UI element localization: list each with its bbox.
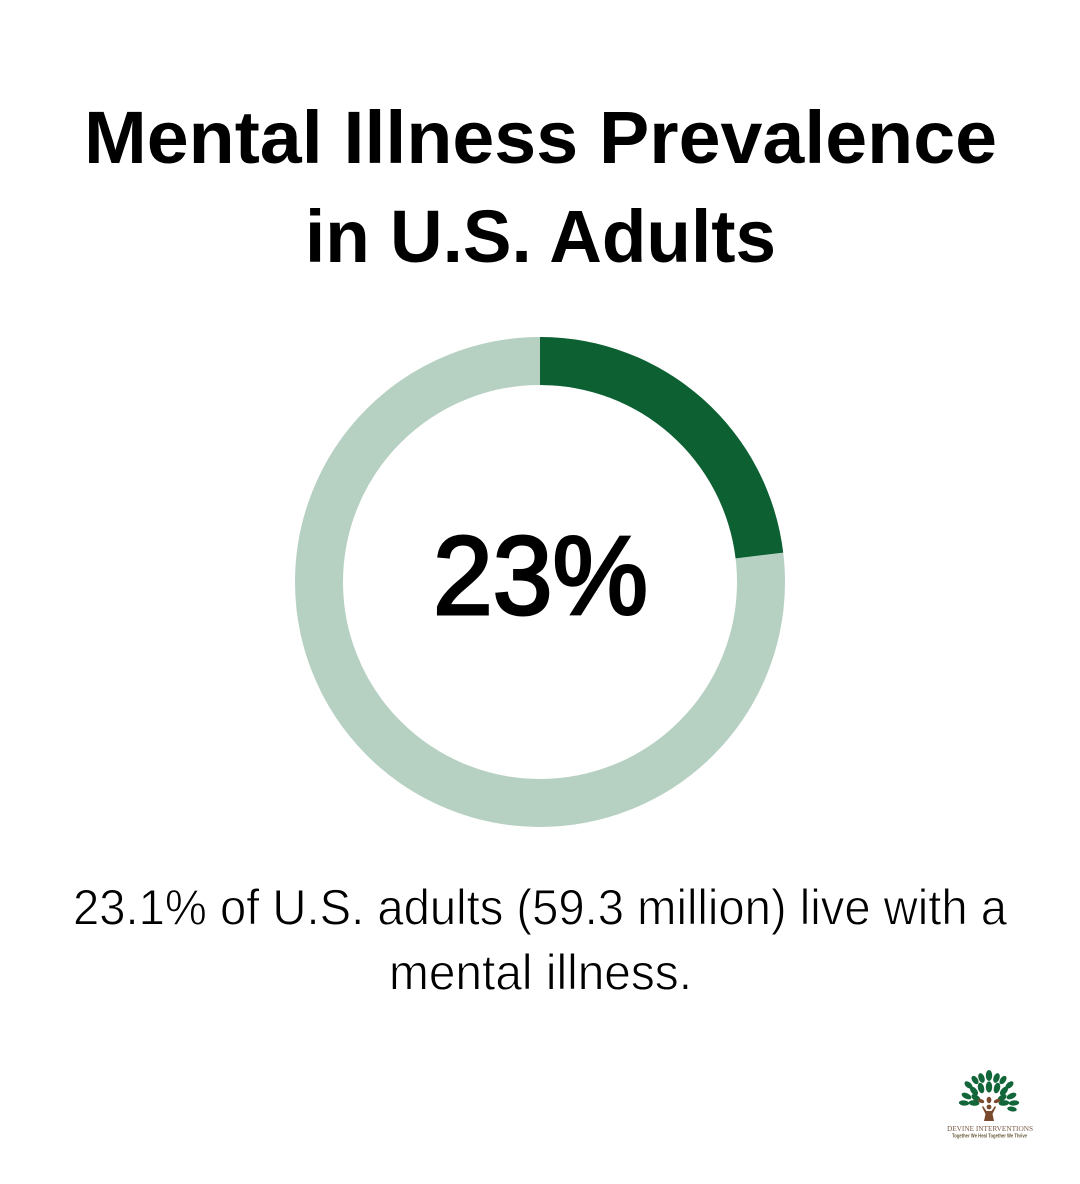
title: Mental Illness Prevalence — [84, 96, 997, 179]
logo: Devine Interventions — [947, 1070, 1033, 1140]
donut value: 23% — [433, 514, 648, 638]
caption: mental illness. — [389, 944, 692, 1000]
icon: tree trunk figure — [977, 1097, 1001, 1121]
icon: tree leaves — [959, 1070, 1019, 1112]
caption — [73, 880, 1007, 1000]
logo tagline: Together We Heal Together We Thrive — [952, 1134, 1027, 1140]
logo name: DEVINE INTERVENTIONS — [947, 1125, 1033, 1133]
caption: 23.1% of U.S. adults (59.3 million) live with a — [73, 880, 1007, 936]
title — [84, 96, 997, 278]
title: in U.S. Adults — [305, 195, 776, 278]
donut chart: 23.1% — [319, 337, 783, 803]
